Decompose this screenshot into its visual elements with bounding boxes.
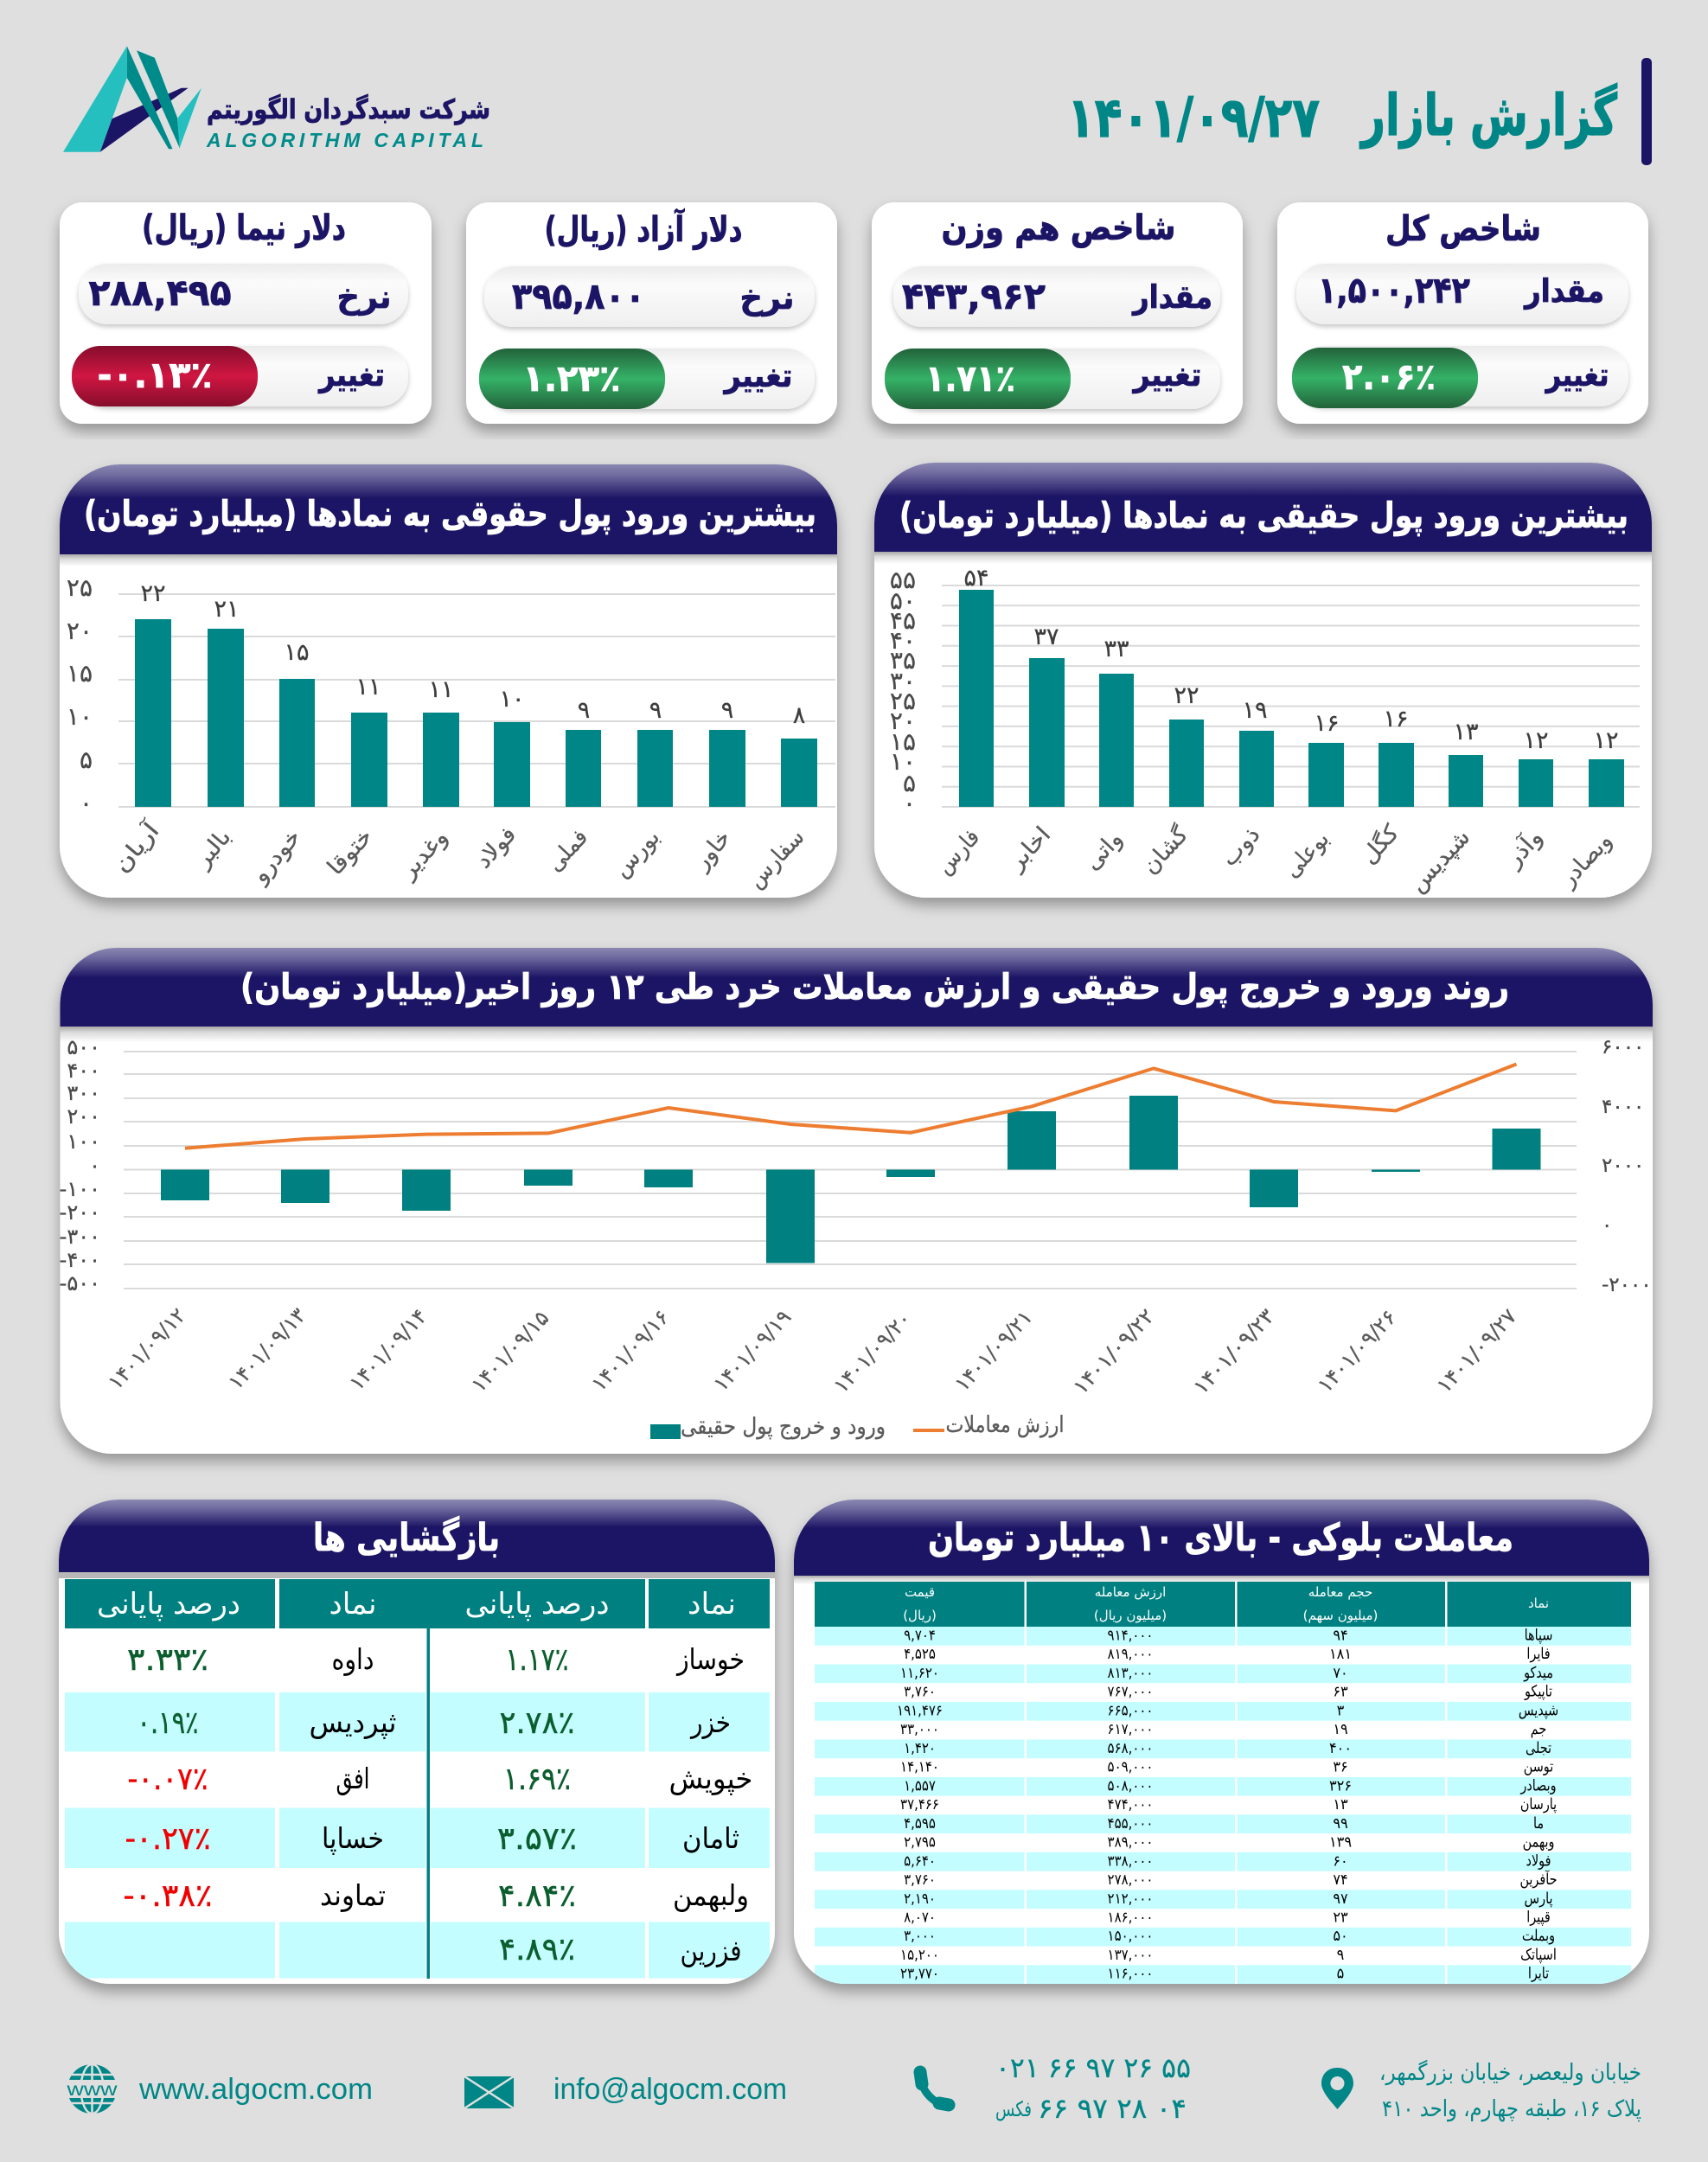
panel heading — [60, 464, 837, 554]
bar chart: legal money: ۱۱ — [428, 676, 454, 703]
table: block trades: ۴۰۰ — [1329, 1739, 1352, 1756]
bar chart: legal money: ۸ — [793, 702, 805, 729]
card: free dollar — [466, 202, 837, 424]
table: reopenings: -۰.۲۷٪ — [125, 1821, 211, 1857]
table: block trades: ۵۰۸,۰۰۰ — [1108, 1776, 1153, 1794]
card: nima dollar: -۰.۱۳٪ — [97, 354, 213, 396]
footer: website: www.algocm.com — [138, 2073, 373, 2106]
bar chart: legal money: ۱۵ — [67, 659, 93, 688]
table: block trades: ۸۱۹,۰۰۰ — [1108, 1645, 1153, 1662]
bar chart: legal money: ۵ — [80, 745, 93, 774]
bar chart: real money: ۱۹ — [1242, 697, 1268, 724]
bar chart: real money: کگل — [1355, 819, 1405, 869]
combo chart: bars and line: -۳۰۰ — [60, 1225, 100, 1249]
footer: email — [464, 2073, 787, 2108]
table: reopenings: خزر — [689, 1705, 731, 1739]
table: reopenings: -۰.۳۸٪ — [123, 1878, 213, 1914]
table: block trades: ۳۲۶ — [1329, 1777, 1352, 1794]
combo chart: bars and line: ۱۴۰۱/۰۹/۱۴ — [344, 1304, 432, 1395]
combo chart: bars and line: -۵۰۰ — [60, 1271, 100, 1295]
card: equal weight index: ۴۴۳,۹۶۲ — [902, 275, 1046, 317]
table: block trades: ۲۱۲,۰۰۰ — [1108, 1890, 1153, 1907]
table: reopenings — [65, 1579, 770, 1979]
table: block trades: ۵,۶۴۰ — [904, 1852, 936, 1870]
table: reopenings: نماد — [329, 1587, 377, 1622]
combo chart: bars and line: ۲۰۰۰ — [1602, 1155, 1644, 1177]
card: equal weight index — [872, 202, 1243, 424]
combo chart: bars and line: ۵۰۰ — [67, 1035, 100, 1059]
table: block trades: ۱۹۱,۴۷۶ — [897, 1701, 943, 1719]
bar chart: legal money: ۹ — [578, 697, 590, 724]
table: block trades: ۵ — [1337, 1965, 1344, 1982]
table: block trades: ۹,۷۰۴ — [904, 1626, 936, 1644]
table: reopenings: خساپا — [322, 1821, 384, 1855]
panel heading: معاملات بلوکی - بالای ۱۰ میلیارد تومان — [928, 1516, 1513, 1560]
combo chart: bars and line: ۲۰۰ — [67, 1104, 100, 1129]
bar chart: legal money: ۰ — [80, 789, 93, 817]
bar chart: real money: ۲۲ — [1174, 682, 1199, 709]
bar chart: real money — [890, 565, 1640, 898]
table: block trades: ۱,۴۲۰ — [904, 1739, 936, 1756]
table: block trades: ۹ — [1337, 1947, 1344, 1963]
table: block trades: ۷۰ — [1333, 1665, 1348, 1681]
table: block trades: (ریال) — [903, 1608, 937, 1623]
title: market report and date — [1067, 58, 1652, 165]
table: reopenings: درصد پایانی — [465, 1587, 609, 1622]
bar chart: legal money: سفارس — [743, 824, 809, 893]
table: block trades: ۱۱۶,۰۰۰ — [1108, 1965, 1153, 1982]
table: block trades: ۳۶ — [1333, 1758, 1348, 1775]
combo chart: bars and line: ۱۴۰۱/۰۹/۲۱ — [950, 1305, 1037, 1396]
table: block trades: ۶۶۵,۰۰۰ — [1108, 1701, 1153, 1719]
bar chart: legal money: ۱۱ — [355, 674, 381, 700]
card: nima dollar: تغییر — [317, 356, 385, 393]
table: block trades: ۴,۵۹۵ — [904, 1814, 936, 1832]
table: block trades: پارسان — [1520, 1795, 1557, 1814]
table: reopenings: نماد — [688, 1587, 736, 1622]
panel heading — [61, 948, 1653, 1027]
bar chart: real money: وآذر — [1498, 823, 1548, 873]
table: block trades: ۲,۱۹۰ — [904, 1890, 936, 1907]
footer: website — [64, 2064, 373, 2114]
legend: ورود و خروج پول حقیقی — [681, 1414, 886, 1440]
table: reopenings: خوساز — [675, 1642, 745, 1676]
panel heading — [59, 1500, 775, 1572]
table: reopenings: ۳.۳۳٪ — [127, 1642, 208, 1678]
footer: phone: ۶۶ ۹۷ ۲۸ ۰۴ — [1038, 2092, 1187, 2125]
footer: address: خیابان ولیعصر، خیابان بزرگمهر، — [1379, 2059, 1641, 2086]
table: block trades: ۳۸۹,۰۰۰ — [1108, 1833, 1153, 1851]
table: block trades: توسن — [1524, 1757, 1553, 1776]
table: block trades: نماد — [1528, 1596, 1549, 1611]
table: reopenings: تماوند — [320, 1878, 386, 1912]
bar chart: real money: ۳۵ — [890, 646, 916, 675]
table: block trades: ۳,۷۶۰ — [904, 1683, 936, 1700]
table: block trades: پارس — [1525, 1889, 1552, 1908]
table: block trades: وبصادر — [1520, 1776, 1557, 1795]
bar chart: real money: ۵۰ — [890, 586, 916, 615]
bar chart: real money: وبصادر — [1554, 828, 1617, 893]
icon: envelope — [464, 2076, 514, 2108]
table: block trades: ۳,۰۰۰ — [904, 1927, 936, 1944]
bar chart: real money: ۳۰ — [890, 667, 916, 695]
footer: address: پلاک ۱۶، طبقه چهارم، واحد ۴۱۰ — [1382, 2096, 1641, 2122]
bar chart: legal money — [67, 573, 835, 893]
table: block trades: سپاها — [1525, 1626, 1552, 1645]
table: reopenings: ۰.۱۹٪ — [137, 1705, 199, 1741]
table: block trades: (میلیون سهم) — [1303, 1608, 1378, 1623]
combo chart: bars and line: ۰ — [89, 1154, 100, 1178]
combo chart: bars and line — [60, 1035, 1652, 1399]
table: block trades — [815, 1582, 1631, 1984]
bar chart: real money: ۲۵ — [890, 687, 916, 715]
table: block trades: ۱۳۷,۰۰۰ — [1108, 1946, 1153, 1963]
panel heading — [794, 1500, 1649, 1576]
bar chart: real money: ۱۶ — [1383, 706, 1409, 732]
card: total index: مقدار — [1523, 272, 1604, 310]
table: block trades: ۷۶۷,۰۰۰ — [1108, 1683, 1153, 1700]
table: block trades: ۹۴ — [1333, 1627, 1348, 1644]
table: block trades: ۴۷۴,۰۰۰ — [1108, 1795, 1153, 1813]
bar chart: real money: ۰ — [903, 789, 916, 817]
table: block trades: ۱۳۹ — [1329, 1833, 1352, 1851]
table: reopenings: ۱.۱۷٪ — [505, 1642, 569, 1678]
table: block trades: ۲۷۸,۰۰۰ — [1108, 1871, 1153, 1888]
combo chart: bars and line: ۴۰۰۰ — [1602, 1096, 1644, 1118]
combo chart: bars and line: ۶۰۰۰ — [1602, 1036, 1644, 1059]
combo chart: bars and line: ۱۴۰۱/۰۹/۱۹ — [708, 1305, 796, 1396]
icon: phone — [920, 2071, 949, 2106]
bar chart: legal money: ۲۲ — [140, 580, 166, 607]
bar chart: real money: ۵ — [903, 769, 916, 797]
table: reopenings: ثپردیس — [310, 1705, 396, 1739]
table: block trades: ۳ — [1337, 1702, 1344, 1719]
table: reopenings: ۲.۷۸٪ — [500, 1705, 574, 1741]
bar chart: legal money: ۲۱ — [214, 596, 240, 623]
logo: Algorithm Capital: ALGORITHM CAPITAL — [206, 129, 483, 151]
panel heading: بیشترین ورود پول حقوقی به نمادها (میلیارد تومان) — [84, 493, 816, 535]
bar chart: real money: ۱۵ — [890, 727, 916, 756]
card: nima dollar: نرخ — [337, 278, 391, 316]
card: equal weight index: شاخص هم وزن — [941, 208, 1176, 248]
card: total index: ۲.۰۶٪ — [1342, 355, 1436, 398]
card: nima dollar: ۲۸۸,۴۹۵ — [88, 272, 232, 314]
table: reopenings: ۴.۸۴٪ — [498, 1878, 576, 1914]
card: free dollar: نرخ — [740, 279, 794, 317]
combo chart: bars and line: ۱۴۰۱/۰۹/۲۳ — [1188, 1304, 1279, 1399]
combo chart: bars and line: -۲۰۰ — [60, 1200, 100, 1225]
table: reopenings: ثامان — [682, 1821, 739, 1855]
table: block trades: میدکو — [1523, 1663, 1553, 1682]
table: block trades: فایرا — [1526, 1645, 1551, 1664]
bar chart: real money: شپدیس — [1404, 824, 1475, 898]
bar chart: legal money: بالبر — [189, 824, 236, 874]
legend — [650, 1412, 1064, 1440]
bar chart: legal money: وغدیر — [394, 824, 453, 886]
footer: phone: فکس — [995, 2097, 1032, 2121]
bar chart: legal money: ۱۰ — [499, 686, 525, 713]
card: free dollar: تغییر — [723, 357, 792, 394]
combo chart: bars and line: ۳۰۰ — [67, 1081, 100, 1105]
table: block trades: ۸,۰۷۰ — [904, 1909, 936, 1926]
table: block trades: ۹۹ — [1333, 1814, 1348, 1832]
bar chart: real money: ۱۳ — [1453, 719, 1479, 745]
bar chart: real money: ۱۶ — [1314, 710, 1340, 737]
legend: ارزش معاملات — [946, 1412, 1064, 1438]
table: block trades: ۴,۵۲۵ — [904, 1645, 936, 1662]
combo chart: bars and line: -۴۰۰ — [60, 1248, 100, 1272]
bar chart: real money: ۱۰ — [890, 747, 916, 776]
table: block trades: ۶۳ — [1333, 1683, 1348, 1700]
panel heading: روند ورود و خروج پول حقیقی و ارزش معاملات خرد طی ۱۲ روز اخیر(میلیارد تومان) — [240, 966, 1509, 1008]
bar chart: legal money: آریان — [107, 816, 166, 878]
card: nima dollar — [60, 202, 432, 424]
table: block trades: تایرا — [1528, 1964, 1549, 1983]
table: block trades: قیمت — [905, 1584, 935, 1600]
table: block trades: تجلی — [1526, 1738, 1551, 1756]
bar chart: legal money: ۲۵ — [67, 573, 93, 602]
table: block trades: شپدیس — [1519, 1701, 1558, 1720]
table: reopenings: ولبهمن — [673, 1878, 749, 1912]
combo chart: bars and line: ۱۴۰۱/۰۹/۲۰ — [828, 1307, 916, 1398]
table: reopenings: افق — [336, 1762, 370, 1796]
bar chart: real money: فارس — [931, 824, 985, 880]
card: free dollar: ۱.۲۳٪ — [522, 357, 621, 400]
table: block trades: ۶۱۷,۰۰۰ — [1108, 1720, 1153, 1737]
table: reopenings: ۱.۶۹٪ — [503, 1762, 571, 1797]
card: total index: شاخص کل — [1385, 209, 1541, 249]
table: reopenings: ۴.۸۹٪ — [499, 1932, 575, 1967]
card: equal weight index: ۱.۷۱٪ — [925, 357, 1015, 400]
bar chart: real money: اخابر — [1002, 822, 1056, 877]
title: market report and date: گزارش بازار — [1359, 82, 1617, 149]
combo chart: bars and line: ۱۴۰۱/۰۹/۱۳ — [223, 1303, 310, 1394]
table: reopenings: -۰.۰۷٪ — [128, 1762, 208, 1797]
panel heading — [874, 463, 1652, 552]
table: block trades: ۱۴,۱۴۰ — [900, 1758, 939, 1775]
card: total index: تغییر — [1545, 356, 1609, 393]
table: reopenings: فزرین — [680, 1934, 742, 1967]
table: block trades: حجم معامله — [1308, 1584, 1372, 1600]
table: block trades: جم — [1531, 1720, 1546, 1738]
table: reopenings: داوه — [332, 1642, 374, 1676]
bar chart: real money: ۵۴ — [963, 565, 989, 592]
logo: Algorithm Capital — [63, 46, 490, 152]
combo chart: bars and line: ۰ — [1602, 1214, 1612, 1237]
card: nima dollar: دلار نیما (ریال) — [142, 208, 346, 248]
table: block trades: ۱۸۱ — [1329, 1646, 1352, 1662]
footer: email: info@algocm.com — [553, 2073, 787, 2106]
bar chart: real money: ۱۲ — [1593, 727, 1619, 754]
table: block trades: ۷۴ — [1333, 1871, 1348, 1888]
table: reopenings: خپویش — [669, 1762, 752, 1795]
table: block trades: ۳۳۸,۰۰۰ — [1108, 1852, 1153, 1870]
card: total index: ۱,۵۰۰,۲۴۲ — [1318, 269, 1470, 311]
table: block trades: ۳۷,۴۶۶ — [900, 1795, 939, 1813]
table: block trades: فولاد — [1526, 1852, 1551, 1871]
footer: phone: ۰۲۱ ۶۶ ۹۷ ۲۶ ۵۵ — [995, 2051, 1191, 2084]
card: free dollar: دلار آزاد (ریال) — [545, 208, 742, 250]
table: block trades: ۹۷ — [1333, 1890, 1348, 1907]
bar chart: legal money: بورس — [609, 824, 665, 883]
table: block trades: ۳۳,۰۰۰ — [900, 1720, 939, 1737]
panel: 12 day trend chart — [60, 948, 1653, 1454]
panel: reopenings — [59, 1500, 775, 1984]
table: block trades: ۶۰ — [1333, 1852, 1348, 1869]
table: block trades: ما — [1533, 1813, 1544, 1832]
bar chart: real money: بوعلی — [1279, 826, 1334, 883]
combo chart: bars and line: ۱۴۰۱/۰۹/۲۶ — [1313, 1305, 1401, 1398]
table: block trades: ۹۱۴,۰۰۰ — [1108, 1626, 1153, 1644]
bar chart: real money: ۱۲ — [1523, 727, 1549, 754]
combo chart: bars and line: ۴۰۰ — [67, 1059, 100, 1083]
combo chart: bars and line: ۱۴۰۱/۰۹/۱۶ — [586, 1305, 674, 1396]
card: free dollar: ۳۹۵,۸۰۰ — [512, 275, 645, 317]
bar chart: real money: ذوب — [1216, 822, 1265, 872]
table: block trades: ۸۱۳,۰۰۰ — [1108, 1664, 1153, 1681]
table: block trades: ۲,۷۹۵ — [904, 1833, 936, 1851]
combo chart: bars and line: -۱۰۰ — [60, 1177, 100, 1201]
table: block trades: قپیرا — [1526, 1908, 1551, 1927]
table: block trades: ۲۳,۷۷۰ — [900, 1965, 939, 1982]
table: block trades: ۱۵,۲۰۰ — [900, 1946, 939, 1963]
bar chart: real money: ۳۳ — [1103, 636, 1129, 662]
combo chart: bars and line: ۱۴۰۱/۰۹/۲۷ — [1432, 1304, 1521, 1398]
table: block trades: ۴۵۵,۰۰۰ — [1108, 1814, 1153, 1832]
title: market report and date: ۱۴۰۱/۰۹/۲۷ — [1067, 86, 1320, 150]
combo chart: bars and line: ۱۰۰ — [67, 1129, 100, 1154]
bar chart: legal money: ۹ — [649, 697, 662, 724]
table: block trades: ۱۱,۶۲۰ — [900, 1664, 939, 1681]
table: block trades: ۱۳ — [1333, 1796, 1348, 1813]
panel heading: بازگشایی ها — [313, 1515, 500, 1560]
table: block trades: ۵۰ — [1333, 1928, 1348, 1944]
panel: block trades — [794, 1500, 1649, 1984]
bar chart: legal money: فملی — [542, 824, 593, 877]
card: total index — [1277, 202, 1648, 424]
table: block trades: تاپیکو — [1524, 1682, 1552, 1701]
table: block trades: ۱,۵۵۷ — [904, 1776, 936, 1794]
table: block trades: حآفرین — [1519, 1870, 1558, 1890]
table: block trades: اسپاتک — [1520, 1945, 1557, 1965]
bar chart: real money: واتی — [1079, 826, 1128, 875]
table: block trades: ۲۳ — [1333, 1909, 1348, 1926]
bar chart: legal money: ۹ — [721, 697, 733, 724]
logo: Algorithm Capital: شرکت سبدگردان الگوریتم — [207, 93, 490, 125]
table: block trades: ارزش معامله — [1095, 1584, 1166, 1600]
table: reopenings: درصد پایانی — [97, 1587, 240, 1622]
table: block trades: وبملت — [1522, 1927, 1555, 1946]
panel: real money inflow chart — [874, 463, 1652, 898]
bar chart: legal money: خاور — [688, 825, 736, 876]
bar chart: legal money: ۲۰ — [67, 617, 93, 645]
combo chart: bars and line: -۲۰۰۰ — [1602, 1274, 1652, 1296]
bar chart: legal money: فولاد — [470, 822, 521, 873]
panel: legal money inflow chart — [60, 464, 837, 898]
bar chart: real money: ۳۷ — [1033, 624, 1059, 650]
table: block trades: ۵۶۸,۰۰۰ — [1108, 1739, 1153, 1756]
bar chart: legal money: خودرو — [246, 824, 306, 890]
bar chart: legal money: ختوقا — [323, 823, 378, 880]
bar chart: real money: ۴۰ — [890, 626, 916, 655]
combo chart: bars and line: ۱۴۰۱/۰۹/۲۲ — [1068, 1304, 1159, 1399]
table: reopenings: ۳.۵۷٪ — [497, 1821, 577, 1857]
bar chart: legal money: ۱۵ — [284, 639, 310, 666]
combo chart: bars and line: ۱۴۰۱/۰۹/۱۵ — [466, 1306, 553, 1397]
table: block trades: ۳,۷۶۰ — [904, 1871, 936, 1888]
bar chart: real money: ۴۵ — [890, 606, 916, 635]
table: block trades: وبهمن — [1523, 1833, 1554, 1852]
bar chart: real money: ۵۵ — [890, 566, 916, 594]
table: block trades: (میلیون ریال) — [1094, 1608, 1167, 1623]
bar chart: real money: ۲۰ — [890, 707, 916, 735]
footer: phone — [920, 2051, 1191, 2125]
bar chart: real money: گشان — [1136, 821, 1194, 880]
combo chart: bars and line: ۱۴۰۱/۰۹/۱۲ — [103, 1303, 190, 1394]
icon: globe: www — [66, 2080, 118, 2100]
icon: location pin — [1321, 2068, 1353, 2109]
table: block trades: ۵۰۹,۰۰۰ — [1108, 1758, 1153, 1775]
table: block trades: ۱۹ — [1333, 1721, 1348, 1737]
card: equal weight index: مقدار — [1131, 278, 1212, 316]
table: block trades: ۱۵۰,۰۰۰ — [1108, 1927, 1153, 1944]
bar chart: legal money: ۱۰ — [67, 702, 93, 731]
table: block trades: ۱۸۶,۰۰۰ — [1108, 1909, 1153, 1926]
card: equal weight index: تغییر — [1132, 356, 1202, 393]
icon: globe — [64, 2064, 121, 2114]
footer: address — [1321, 2059, 1641, 2122]
